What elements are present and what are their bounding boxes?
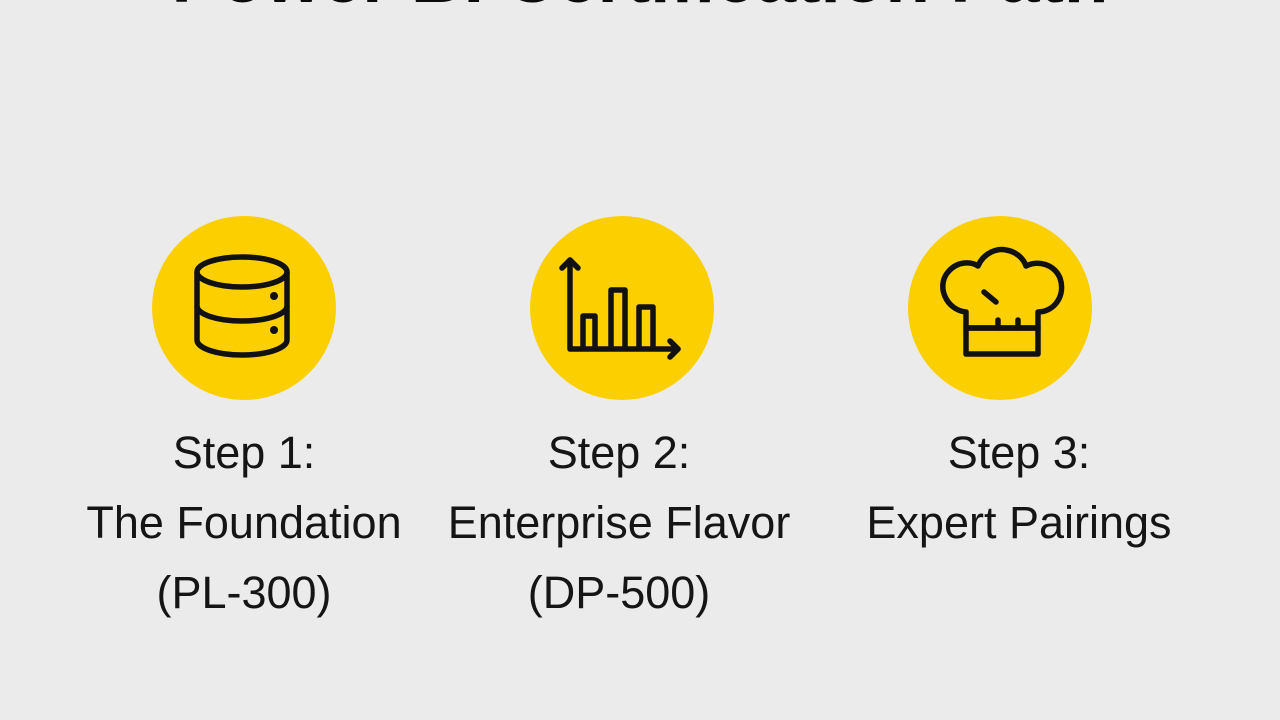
icon: bar chart [530, 216, 714, 400]
step 3 text: Expert Pairings [866, 497, 1172, 548]
step 1 text: Step 1: [173, 427, 315, 478]
step 1 text: (PL-300) [156, 567, 332, 618]
step 2 text: Step 2: [548, 427, 690, 478]
step 1 text [86, 427, 402, 618]
step 1 text: The Foundation [86, 497, 402, 548]
step 3 text: Step 3: [948, 427, 1090, 478]
step 3 text [866, 427, 1172, 548]
step 2 text: Enterprise Flavor [448, 497, 790, 548]
step 2 text: (DP-500) [528, 567, 710, 618]
step 2 text [448, 427, 790, 618]
icon: database [152, 216, 336, 400]
icon: chef hat [908, 216, 1092, 400]
